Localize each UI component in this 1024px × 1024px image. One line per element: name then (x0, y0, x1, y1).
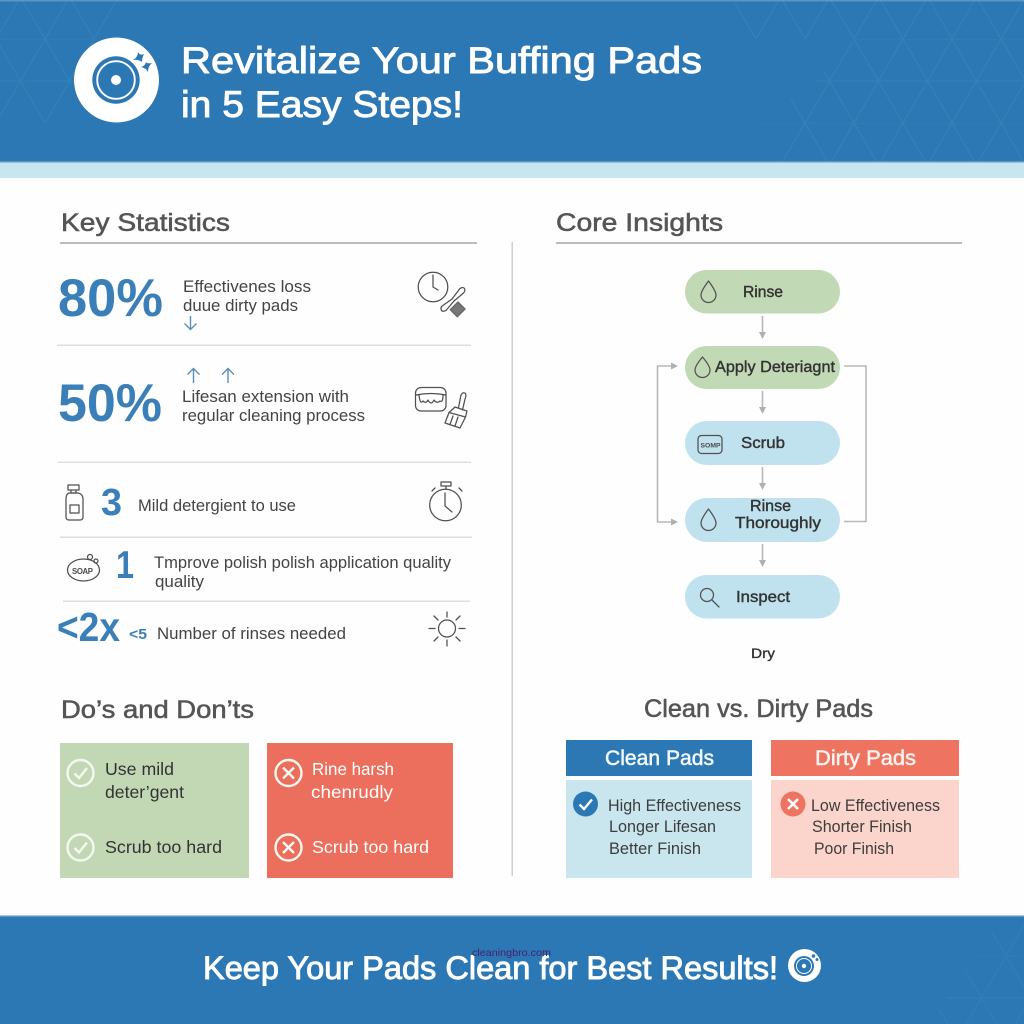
statistic: 80%: 80% (58, 269, 163, 328)
statistic: 80% (58, 269, 465, 330)
statistic: <2x rinses: <5 (129, 626, 147, 643)
card: clean pads: Longer Lifesan (609, 818, 716, 836)
statistic: 80%: Effectivenes loss (183, 278, 311, 296)
step: rinse thoroughly: Rinse (750, 498, 791, 515)
card: do's: Scrub too hard (105, 837, 222, 857)
card: dirty pads: Shorter Finish (812, 818, 912, 836)
step: scrub (685, 421, 840, 465)
icon: pad and paint brush (416, 388, 467, 428)
card: clean pads: Better Finish (609, 840, 701, 858)
source label: cleaningbro.com (472, 947, 551, 959)
panel: key statistics (57, 209, 477, 650)
statistic: 50% (58, 368, 467, 433)
statistic: 3 mild detergent: Mild detergient to use (138, 497, 296, 515)
card: do's: deter’gent (105, 782, 184, 802)
card: don'ts: Scrub too hard (312, 837, 429, 857)
icon: small buffing pad logo (788, 949, 821, 982)
card: don'ts (267, 743, 453, 878)
statistic: <2x rinses: Number of rinses needed (157, 625, 346, 643)
card: clean pads (566, 740, 752, 878)
arrow: rinse to detergent (759, 316, 766, 339)
title: in 5 Easy Steps! (181, 84, 463, 125)
heading: clean vs dirty: Clean vs. Dirty Pads (644, 695, 873, 723)
statistic: <2x rinses: <2x (57, 604, 120, 650)
statistic: 3 mild detergent (66, 482, 462, 524)
statistic: 50%: 50% (58, 374, 162, 433)
label: dry: Dry (751, 645, 775, 661)
step: apply detergent (685, 346, 840, 389)
header banner (0, 0, 1024, 178)
statistic: 3 mild detergent: 3 (101, 482, 122, 524)
arrow: left feedback loop (658, 362, 678, 526)
icon: stopwatch (430, 482, 462, 521)
card: do's (60, 743, 249, 878)
statistic: <2x rinses (57, 604, 465, 650)
heading: key statistics: Key Statistics (61, 209, 230, 237)
arrow: scrub to rinse thoroughly (759, 467, 766, 490)
arrow: rinse thoroughly to inspect (759, 544, 766, 567)
step: rinse (685, 270, 840, 314)
card: don'ts: chenrudly (311, 782, 393, 802)
panel: core insights flow (556, 209, 962, 661)
statistic: 50%: regular cleaning process (182, 407, 365, 425)
heading: core insights: Core Insights (556, 209, 723, 237)
icon: detergent bottle (66, 485, 83, 520)
step: scrub: SOMP (700, 442, 721, 450)
step: inspect (685, 575, 840, 618)
step: rinse: Rinse (743, 284, 783, 301)
icon: soap (68, 554, 100, 581)
statistic: 80%: duue dirty pads (183, 297, 298, 315)
title (181, 40, 702, 125)
icon: sun (429, 612, 465, 646)
card: clean pads: High Effectiveness (608, 797, 741, 815)
card: dirty pads (771, 740, 959, 878)
statistic: 50%: Lifesan extension with (182, 388, 349, 406)
step: apply detergent: Apply Deteriagnt (715, 359, 836, 376)
step: rinse thoroughly (685, 498, 840, 542)
step: scrub: Scrub (741, 435, 785, 452)
card: do's: Use mild (105, 759, 174, 779)
statistic: 1 polish quality: Tmprove polish polish application quality (154, 554, 452, 572)
icon: clock and brush (418, 272, 465, 317)
step: rinse thoroughly: Thoroughly (735, 515, 821, 532)
card: dirty pads: Dirty Pads (815, 747, 916, 770)
footer banner (0, 916, 1024, 1024)
statistic: 1 polish quality: quality (155, 573, 205, 591)
card: dirty pads: Low Effectiveness (811, 797, 940, 815)
footer message: Keep Your Pads Clean for Best Results! (203, 950, 778, 986)
arrow: right feedback loop (844, 366, 866, 522)
statistic: 1 polish quality: 1 (116, 544, 134, 587)
title: Revitalize Your Buffing Pads (181, 40, 702, 81)
icon: buffing pad logo (74, 38, 159, 122)
panel: do's and don'ts (60, 696, 453, 878)
statistic: 1 polish quality (68, 544, 452, 591)
panel: clean vs dirty pads (566, 695, 959, 878)
icon: soap: SOAP (72, 567, 93, 576)
card: dirty pads: Poor Finish (814, 840, 894, 858)
card: don'ts: Rine harsh (312, 759, 394, 779)
step: inspect: Inspect (736, 589, 791, 606)
heading: do's and don'ts: Do’s and Don’ts (61, 696, 254, 724)
arrow: detergent to scrub (759, 391, 766, 414)
card: clean pads: Clean Pads (605, 747, 714, 770)
